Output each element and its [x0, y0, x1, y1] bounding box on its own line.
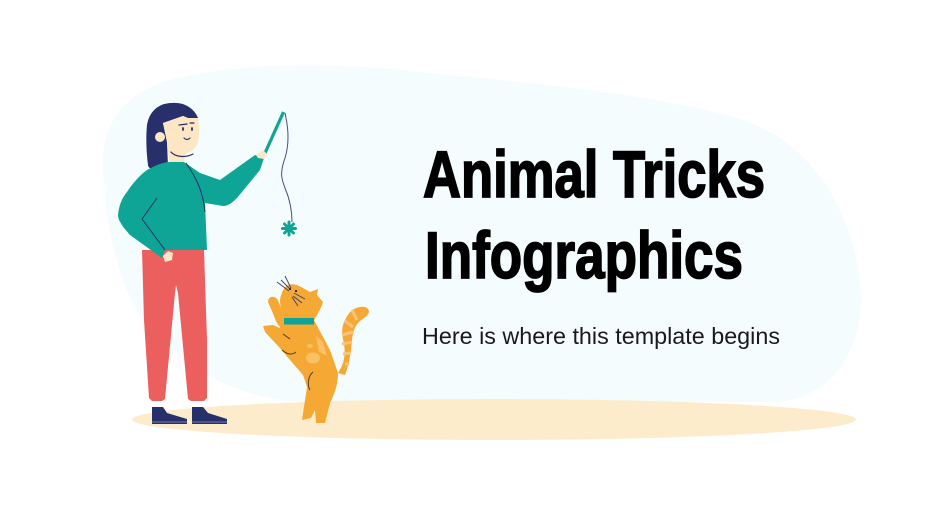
cat head: [280, 284, 323, 320]
trousers: [142, 250, 207, 401]
title line 1: Animal Tricks: [423, 137, 765, 211]
background blob: [103, 65, 861, 402]
body patches: [306, 336, 327, 364]
ground ellipse: [132, 399, 856, 440]
left shoe: [152, 407, 187, 424]
hand on wand: [256, 150, 267, 159]
sweater: [118, 155, 264, 258]
shoe soles: [152, 421, 227, 423]
ear: [155, 132, 165, 142]
neck: [167, 145, 186, 165]
toy pompom: [282, 222, 296, 235]
cat collar: [284, 318, 314, 324]
wand: [265, 112, 284, 153]
subtitle: Here is where this template begins: [422, 323, 780, 349]
toy string: [282, 113, 292, 222]
cat tail: [338, 307, 369, 375]
title: [423, 137, 765, 292]
whiskers: [277, 276, 305, 306]
cat eye and nose: [289, 288, 297, 292]
hair: [146, 103, 198, 170]
right shoe: [192, 407, 227, 424]
facial features: [171, 123, 194, 156]
face: [163, 116, 199, 154]
illustration: girl with toy wand: [118, 103, 296, 424]
title line 2: Infographics: [425, 218, 743, 292]
raised paw: [268, 297, 286, 332]
illustration: orange cat: [263, 276, 369, 423]
cat body: [263, 320, 338, 423]
sweater folds: [142, 163, 205, 250]
tail stripes: [342, 310, 357, 364]
body lines: [282, 334, 313, 390]
hand on hip: [163, 251, 173, 262]
